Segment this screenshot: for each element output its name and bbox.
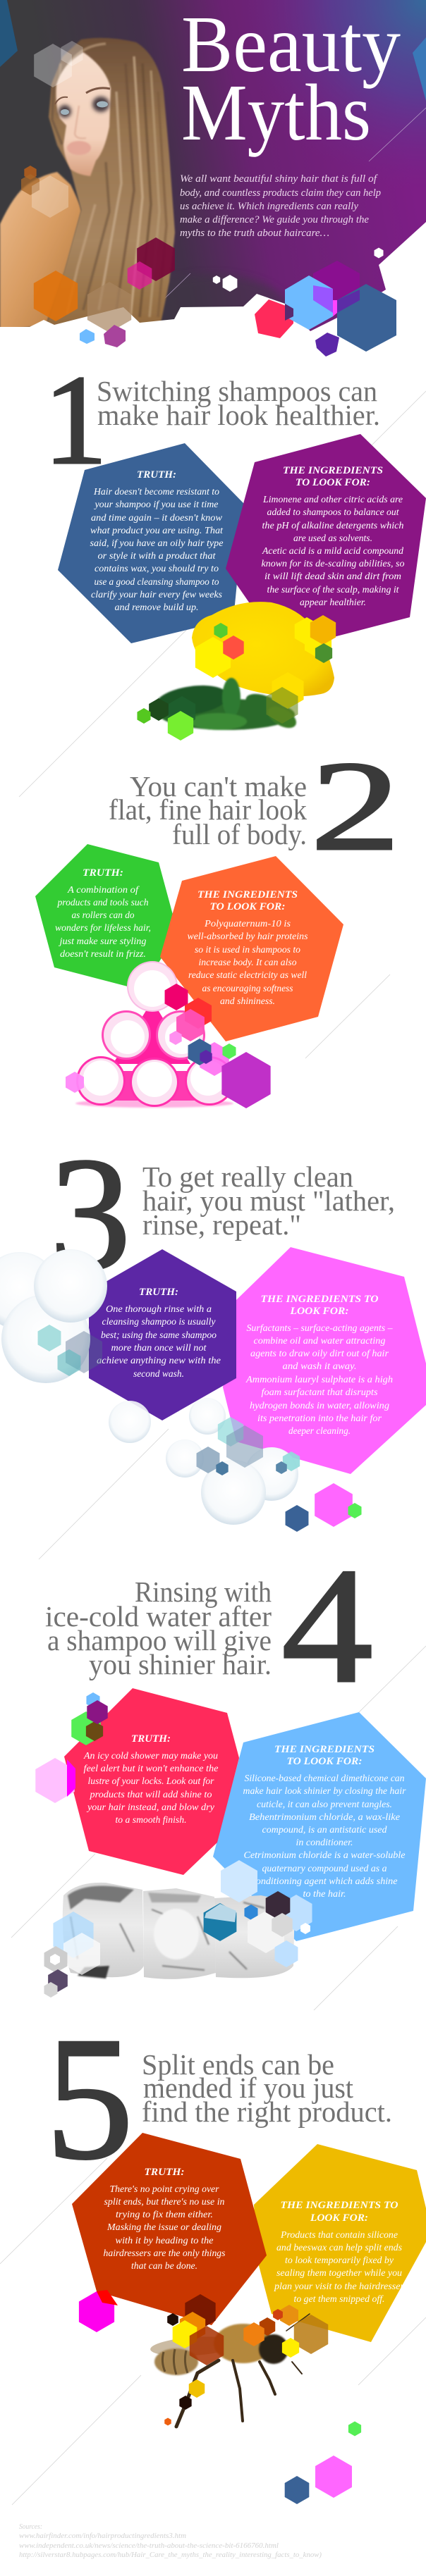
ingredients text: known for its de-scaling abilities, so <box>261 559 405 569</box>
myth heading 2: full of body. <box>172 818 307 850</box>
truth text: cleansing shampoo is usually <box>102 1317 216 1327</box>
sources: Sources: <box>19 2523 42 2531</box>
ingredients text: in conditioner. <box>296 1838 353 1848</box>
ingredients text: increase body. It can also <box>199 958 296 968</box>
truth text: products that will add shine to <box>89 1790 212 1800</box>
title: Beauty Myths <box>181 0 401 157</box>
ingredients text: THE INGREDIENTS <box>197 889 298 900</box>
truth text: There's no point crying over <box>110 2184 219 2195</box>
myth heading 5 <box>142 2048 392 2128</box>
myth heading 2: flat, fine hair look <box>109 793 307 826</box>
truth text: and time again – it doesn't know <box>91 513 223 524</box>
header panel <box>0 0 426 366</box>
ingredients text: make hair look shinier by closing the hair <box>243 1786 406 1797</box>
truth text: as rollers can do <box>72 910 134 921</box>
myth heading 4: you shinier hair. <box>89 1648 272 1680</box>
ingredients text: quaternary compound used as a <box>262 1864 387 1874</box>
photo: honey bee <box>150 2314 310 2427</box>
myth number 3: 3 <box>49 1124 131 1304</box>
myth heading 5: Split ends can be <box>142 2048 334 2081</box>
hexagons over lemon <box>137 615 336 741</box>
photo: lemon and basil <box>154 602 334 732</box>
ingredients text: to get them snipped off. <box>293 2294 385 2305</box>
header white dots <box>213 248 383 292</box>
eyes and brows <box>55 88 110 118</box>
sources: http://silverstar8.hubpages.com/hub/Hair_Care_the_myths_the_reality_interesting_facts_to_know) <box>19 2551 322 2559</box>
truth text: use a good cleansing shampoo to <box>95 577 219 588</box>
ingredients text: THE INGREDIENTS <box>274 1744 375 1755</box>
truth text <box>103 2167 226 2272</box>
ingredients text: hydrogen bonds in water, allowing <box>250 1401 389 1411</box>
truth text <box>55 867 151 960</box>
hair <box>46 38 175 328</box>
ingredients text: combine oil and water attracting <box>254 1336 385 1346</box>
ingredients text: to the hair. <box>303 1889 346 1900</box>
ingredients text: deeper cleaning. <box>288 1426 351 1437</box>
intro text: us achieve it. Which ingredients can really <box>180 201 358 212</box>
truth text: feel alert but it won't enhance the <box>83 1764 219 1774</box>
ingredients text: THE INGREDIENTS TO <box>261 1294 379 1305</box>
intro text: body, and countless products claim they can help <box>180 187 381 199</box>
truth text <box>83 1733 219 1826</box>
section 1 <box>44 349 426 741</box>
truth text: or style it with a product that <box>97 551 217 562</box>
myth number 1: 1 <box>44 349 107 491</box>
ingredients text <box>261 465 405 608</box>
ingredients text <box>274 2200 405 2305</box>
myth heading 5: find the right product. <box>142 2095 392 2128</box>
wings <box>150 2334 238 2358</box>
ingredients text: Acetic acid is a mild acid compound <box>262 546 404 557</box>
ingredients text: cuticle, it can also prevent tangles. <box>257 1800 392 1810</box>
myth heading 5: mended if you just <box>143 2072 354 2104</box>
myth heading 3 <box>142 1160 395 1241</box>
ingredients panel <box>254 2144 426 2342</box>
truth text: lustre of your locks. Look out for <box>87 1776 214 1787</box>
truth text: clarify your hair every few weeks <box>91 590 223 600</box>
ingredients text: added to shampoos to balance out <box>267 507 400 518</box>
photo: soap bubbles lower <box>109 1398 298 1525</box>
footer hexagons <box>285 2421 361 2504</box>
myth heading 3: To get really clean <box>142 1160 353 1193</box>
truth panel <box>35 844 178 990</box>
truth text: more than once will not <box>111 1343 207 1354</box>
face <box>56 52 111 176</box>
sources <box>19 2523 322 2559</box>
hexagons over bee <box>79 2290 328 2425</box>
ingredients text: THE INGREDIENTS TO <box>281 2200 398 2211</box>
ingredients text: LOOK FOR: <box>289 1306 348 1317</box>
truth panel <box>58 443 245 643</box>
myth heading 4: Rinsing with <box>135 1575 272 1608</box>
ingredients text: the pH of alkaline detergents which <box>262 521 403 531</box>
myth number 2: 2 <box>310 736 401 877</box>
shoulder <box>0 172 81 330</box>
myth heading 4: a shampoo will give <box>47 1624 272 1657</box>
ingredients text: Ammonium lauryl sulphate is a high <box>245 1375 393 1385</box>
myth heading 1: Switching shampoos can <box>97 375 377 407</box>
section 5 <box>45 2001 426 2504</box>
truth text: said, if you have an oily hair type <box>90 538 223 549</box>
truth text: TRUTH: <box>144 2167 185 2178</box>
truth text: with it by heading to the <box>116 2236 213 2246</box>
truth text: split ends, but there's no use in <box>104 2197 224 2207</box>
truth text: A combination of <box>67 885 140 896</box>
section 2 <box>35 736 401 1108</box>
header colour hexagon cluster <box>80 261 396 357</box>
ingredients text: LOOK FOR: <box>310 2212 368 2224</box>
ingredients text: Silicone-based chemical dimethicone can <box>244 1773 405 1784</box>
ingredients text <box>243 1744 406 1900</box>
title: Beauty Myths: Myths <box>181 68 371 157</box>
ingredients text <box>188 889 308 1007</box>
ingredients text: plan your visit to the hairdresser <box>274 2281 405 2292</box>
ingredients text: agents to draw oily dirt out of hair <box>250 1349 389 1359</box>
photo: pink hair rollers <box>75 961 234 1108</box>
ingredients text: Polyquaternum-10 is <box>204 919 291 929</box>
ingredients text: are used as solvents. <box>293 533 372 544</box>
truth panel <box>72 2133 267 2325</box>
truth text: best; using the same shampoo <box>101 1330 217 1341</box>
photo: woman with long straight hair <box>0 38 175 330</box>
truth text <box>90 469 224 613</box>
nose and lips <box>67 106 91 155</box>
ingredients text <box>245 1294 393 1437</box>
truth text: TRUTH: <box>131 1733 171 1745</box>
ingredients panel <box>223 1247 426 1474</box>
ingredients text: the surface of the scalp, making it <box>267 585 400 595</box>
sources: www.independent.co.uk/news/science/the-truth-about-the-science-bit-6166760.html <box>19 2542 279 2550</box>
lemon <box>192 602 334 696</box>
myth heading 3: rinse, repeat." <box>142 1208 301 1241</box>
hexagons over ice <box>44 1860 312 1998</box>
truth text: achieve anything new with the <box>97 1356 221 1366</box>
ingredients text: Behentrimonium chloride, a wax-like <box>249 1812 400 1823</box>
truth text: trying to fix them either. <box>116 2210 213 2220</box>
ingredients text: conditioning agent which adds shine <box>251 1876 398 1887</box>
intro text <box>180 173 381 239</box>
ingredients text: so it is used in shampoos to <box>195 945 300 955</box>
ingredients text: and shininess. <box>220 996 275 1007</box>
ingredients panel <box>226 434 426 650</box>
myth heading 2 <box>109 770 307 850</box>
hexagons over rollers <box>66 984 271 1108</box>
ingredients text: its penetration into the hair for <box>257 1413 382 1424</box>
truth text: One thorough rinse with a <box>106 1304 212 1315</box>
truth text: doesn't result in frizz. <box>60 949 146 960</box>
ingredients text: as encouraging softness <box>202 984 293 994</box>
ingredients text: and wash it away. <box>282 1361 357 1372</box>
ingredients text: well-absorbed by hair proteins <box>188 931 308 942</box>
ingredients text: Surfactants – surface-acting agents – <box>247 1323 393 1334</box>
photo: soap bubbles left <box>0 1249 107 1383</box>
myth heading 1: make hair look healthier. <box>97 399 380 431</box>
truth panel <box>89 1249 236 1420</box>
myth number 5: 5 <box>45 2001 134 2196</box>
header diagonal lines <box>164 108 426 299</box>
ingredients text: compound, is an antistatic used <box>262 1825 387 1835</box>
ingredients panel <box>213 1712 426 1941</box>
header corner hexagons <box>0 0 426 101</box>
truth text: hairdressers are the only things <box>103 2248 226 2259</box>
ingredients text: reduce static electricity as well <box>188 970 307 981</box>
truth text: contains wax, you should try to <box>95 564 219 574</box>
ingredients text: appear healthier. <box>300 597 366 608</box>
truth text: second wash. <box>133 1369 184 1380</box>
myth number 4: 4 <box>281 1534 373 1717</box>
ingredients text: TO LOOK FOR: <box>296 477 370 488</box>
truth text: An icy cold shower may make you <box>83 1751 218 1761</box>
truth text <box>97 1287 221 1380</box>
truth text: and remove build up. <box>114 602 199 613</box>
truth text: Hair doesn't become resistant to <box>93 487 219 497</box>
legs and antenna <box>176 2314 310 2427</box>
truth text: what product you are using. That <box>90 526 224 536</box>
myth heading 4: ice-cold water after <box>45 1600 272 1633</box>
ingredients panel <box>160 856 343 1041</box>
ingredients text: THE INGREDIENTS <box>283 465 383 476</box>
ingredients text: Cetrimonium chloride is a water-soluble <box>244 1850 405 1861</box>
truth text: that can be done. <box>131 2261 197 2272</box>
title: Beauty Myths: Beauty <box>181 0 401 89</box>
ingredients text: and beeswax can help split ends <box>276 2243 403 2253</box>
truth text: just make sure styling <box>58 936 147 947</box>
ingredients text: Products that contain silicone <box>280 2230 398 2241</box>
truth text: TRUTH: <box>139 1287 178 1298</box>
thorax <box>214 2324 273 2363</box>
intro text: make a difference? We guide you through the <box>180 214 369 225</box>
myth heading 1 <box>97 375 380 431</box>
ingredients text: it will lift dead skin and dirt from <box>264 571 401 582</box>
truth text: Masking the issue or dealing <box>107 2222 221 2233</box>
hexagons over bubbles <box>38 1325 362 1532</box>
head <box>259 2334 288 2364</box>
hexagons over the photo <box>21 41 175 333</box>
ingredients text: sealing them together while you <box>276 2268 402 2279</box>
truth panel <box>64 1688 239 1875</box>
intro text: myths to the truth about haircare… <box>180 228 329 239</box>
truth text: to a smooth finish. <box>116 1815 186 1826</box>
header gradient background <box>0 0 426 345</box>
section 3 <box>0 1124 426 1532</box>
truth text: TRUTH: <box>83 867 123 879</box>
myth heading 3: hair, you must "lather, <box>142 1184 395 1217</box>
truth text: your hair instead, and blow dry <box>86 1802 215 1813</box>
truth text: products and tools such <box>57 898 148 908</box>
sources: www.hairfinder.com/info/hairproductingredients3.htm <box>19 2532 186 2540</box>
ingredients text: TO LOOK FOR: <box>210 901 285 912</box>
section 4 <box>35 1534 426 1998</box>
header white torn edge <box>0 222 426 366</box>
basil leaves <box>154 678 300 732</box>
ingredients text: to look temporarily fixed by <box>285 2255 394 2266</box>
ingredients text: Limonene and other citric acids are <box>262 495 403 505</box>
myth heading 2: You can't make <box>130 770 307 803</box>
myth heading 4 <box>45 1575 272 1680</box>
hexagons around truth panel <box>35 1692 108 1803</box>
photo: ice cubes <box>63 1883 295 1979</box>
truth text: wonders for lifeless hair, <box>55 923 151 934</box>
truth text: your shampoo if you use it time <box>94 500 219 510</box>
abdomen <box>154 2348 198 2375</box>
truth text: TRUTH: <box>137 469 176 481</box>
intro text: We all want beautiful shiny hair that is full of <box>180 173 378 185</box>
ingredients text: TO LOOK FOR: <box>286 1756 363 1767</box>
ingredients text: foam surfactant that disrupts <box>261 1387 378 1398</box>
